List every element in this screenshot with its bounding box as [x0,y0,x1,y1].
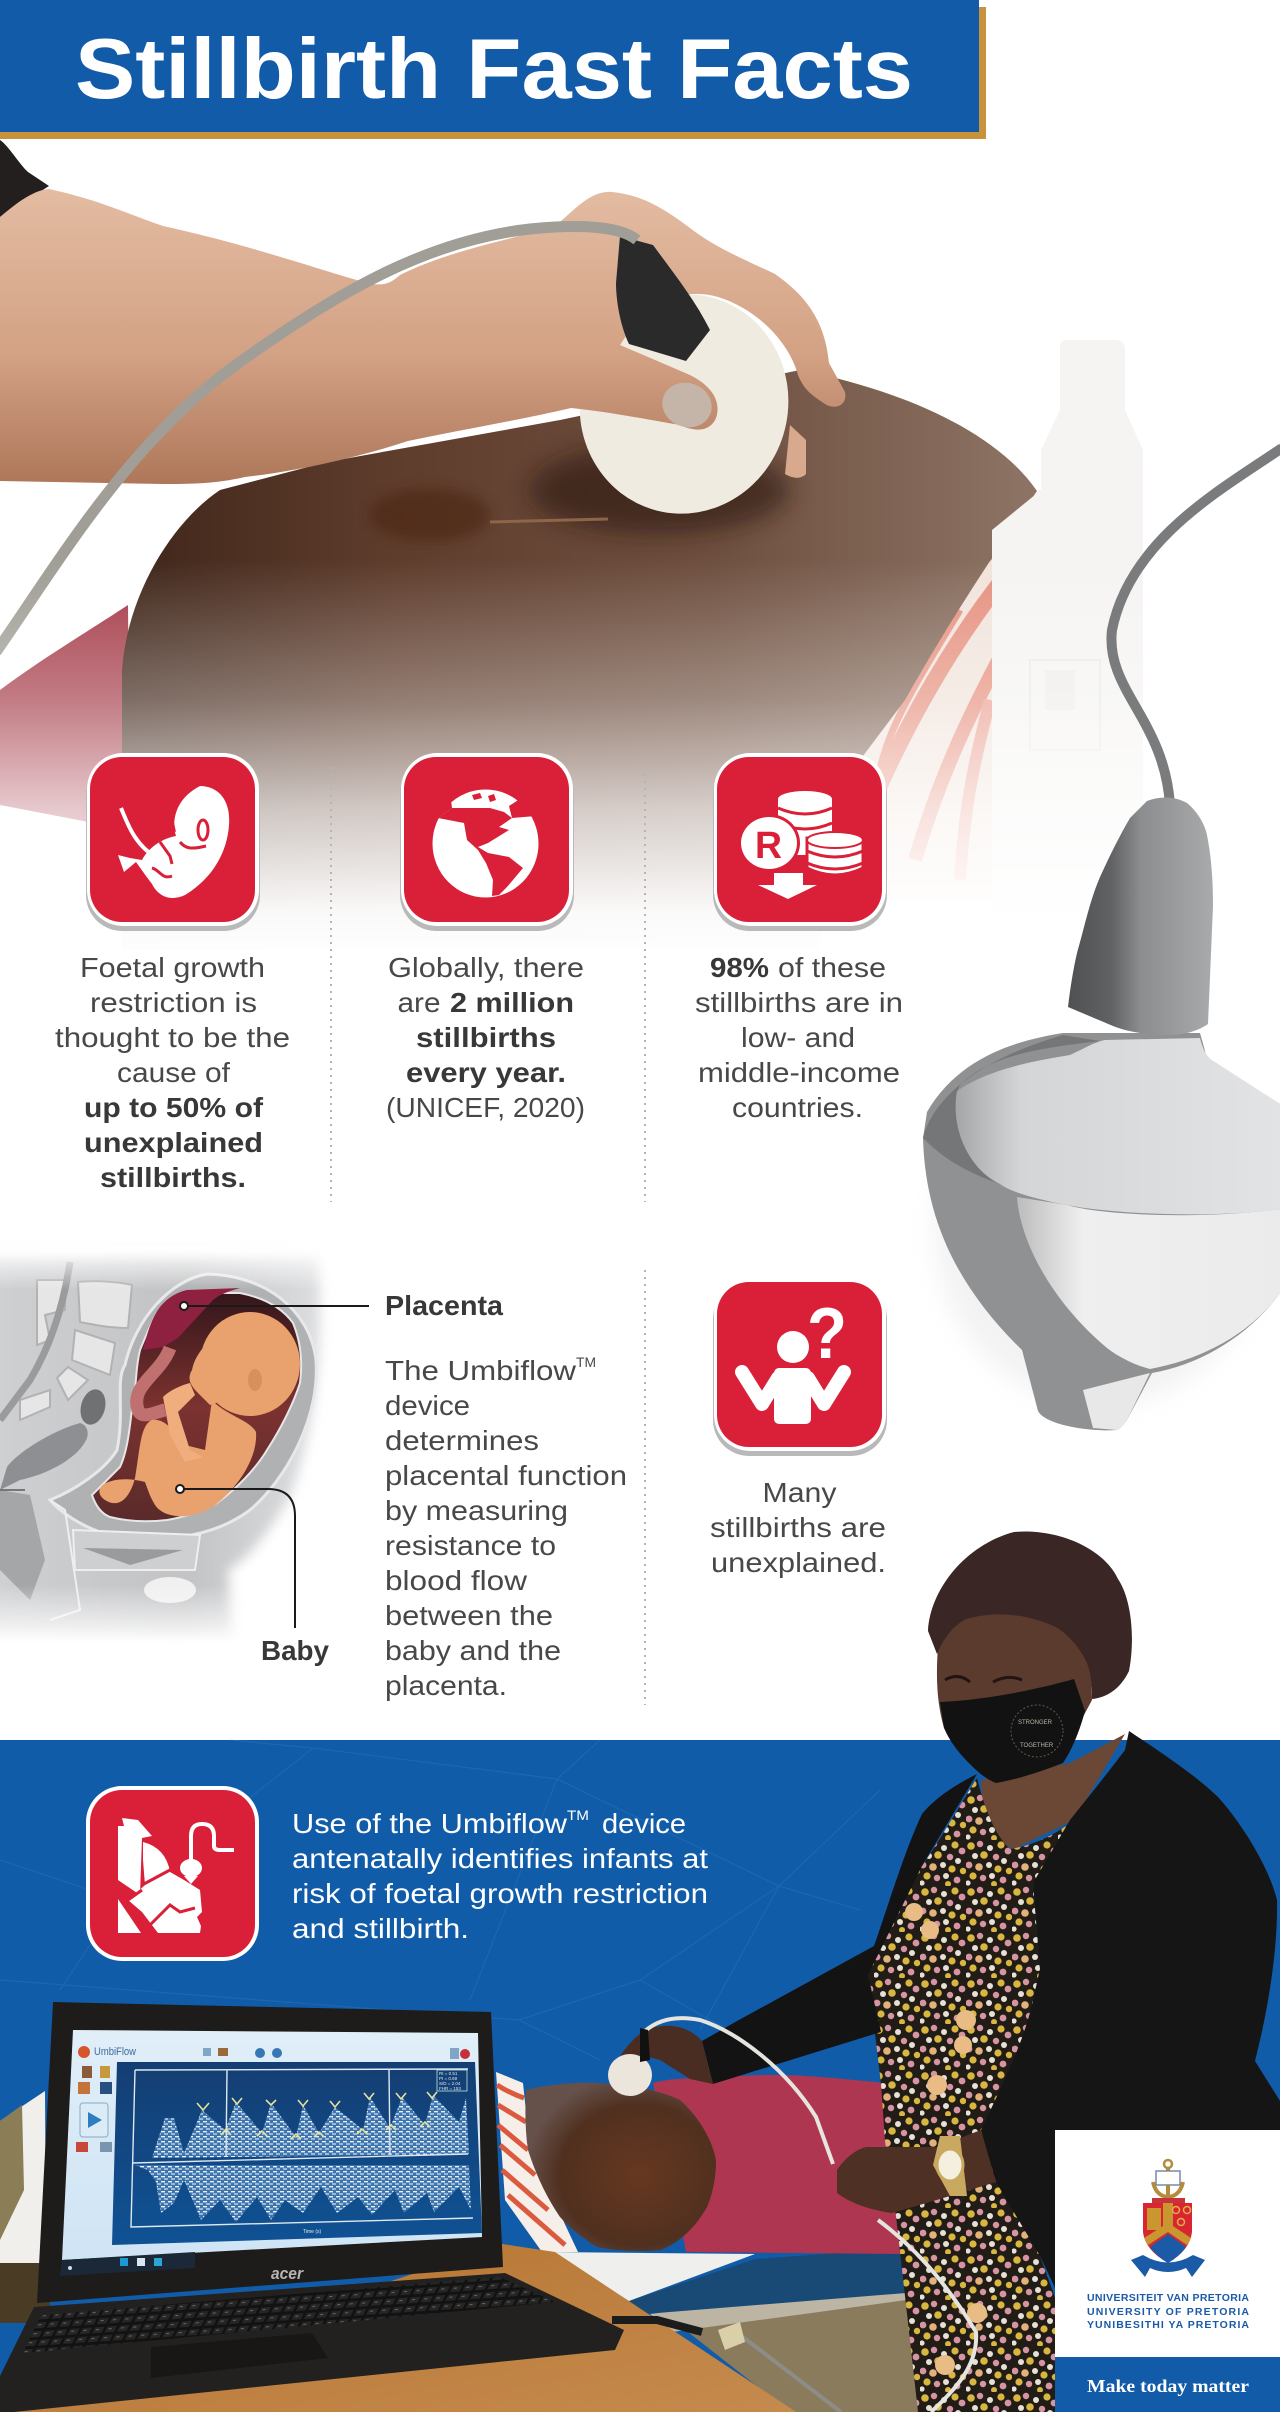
doppler plot area [112,2062,482,2245]
white fade [0,560,1280,960]
probe neck [1068,797,1213,1035]
nurse face [937,1610,1092,1760]
icon: foetus [86,753,260,931]
umbilical cord [137,1348,170,1415]
crest [1131,2160,1205,2277]
striped clothing at right [800,490,1100,900]
divider lines [331,767,645,1705]
hero photo: ultrasound on pregnant belly [0,140,1280,960]
probe bowl light area [1017,1197,1280,1369]
baby leader [176,1485,295,1628]
text: foetal growth restriction: unexplained [84,1127,263,1158]
text: umbiflow device explanation [385,1354,627,1701]
app controls [76,2048,470,2152]
text: low and middle income: low- and [741,1022,855,1053]
plot readout: FHR = 153 [439,2086,461,2091]
probe dome shadow rim [923,1035,1100,1184]
text: global stillbirths: (UNICEF, 2020) [386,1092,585,1123]
icon: person shrugging with question mark [713,1278,887,1456]
label: baby: Baby [261,1635,329,1666]
University of Pretoria logo box [1055,2130,1280,2412]
wrist watch [933,2136,967,2196]
probe dome [956,1038,1280,1214]
university names: UNIVERSITEIT VAN PRETORIA [1087,2292,1249,2304]
red top of patient [653,2075,900,2254]
slogan: Make today matter [1087,2376,1249,2396]
laptop brand: acer [271,2264,304,2283]
face mask [940,1679,1085,1783]
floral dress [868,1778,1074,2412]
shield [1143,2203,1192,2263]
text: many stillbirths unexplained: stillbirths are [710,1512,886,1543]
plot readout [303,2070,467,2235]
keyboard [23,2277,555,2353]
black sleeve [0,140,49,217]
belly [122,370,1037,950]
text: many stillbirths unexplained: unexplained. [711,1547,886,1578]
text: umbiflow identifies infants at risk: antenatally identifies infants at [292,1843,708,1874]
cardigan sleeve [702,1774,977,2084]
laptop [0,2002,624,2412]
white cloth left [0,2091,46,2263]
text: umbiflow device explanation: blood flow [385,1565,528,1596]
text: umbiflow device explanation: by measuring [385,1495,568,1526]
text: low and middle income: stillbirths are in [695,987,903,1018]
clinic scene photo [0,1532,1280,2412]
doppler waveform [134,2095,471,2222]
edge fades [0,1245,345,1290]
screen [62,2030,482,2260]
hand and forearm holding cable [837,2130,996,2213]
hair [928,1532,1132,1699]
text: low and middle income: 98% [710,952,769,983]
paper sheet [549,2252,755,2301]
text: low and middle income: countries. [732,1092,863,1123]
text: many stillbirths unexplained: Many [762,1477,836,1508]
plot readout: Time (s) [303,2229,321,2235]
text: umbiflow device explanation: device [385,1390,470,1421]
probe cable [0,227,637,652]
title banner [0,0,986,139]
nurse [608,1532,1280,2412]
charger cable and tag [612,2320,841,2412]
icon: coins and down arrow [713,753,887,931]
text: umbiflow device explanation: determines [385,1425,539,1456]
taskbar [60,2252,195,2276]
nurse neck and chest [981,1734,1125,1849]
icon: coins and down arrow: R [755,825,782,867]
patient belly [525,2083,716,2251]
little finger tip [785,425,806,478]
spine vertebrae [20,1280,132,1420]
text: foetal growth restriction: cause of [117,1057,230,1088]
text: foetal growth restriction: Foetal growth [80,952,265,983]
probe cable [1111,448,1280,806]
rectum hole [77,1387,109,1427]
anchor and book [1152,2160,1185,2203]
text: umbiflow identifies infants at risk: Use of the Umbiflow [292,1808,568,1839]
baby [99,1312,300,1516]
striped shirt [496,2072,578,2252]
text: foetal growth restriction: stillbirths. [100,1162,246,1193]
text: foetal growth restriction: thought to be the [55,1022,290,1053]
icon: globe [400,753,574,931]
title: Stillbirth Fast Facts [75,22,913,117]
placenta leader [180,1302,369,1310]
amniotic sac [92,1293,301,1521]
laptop base [0,2273,624,2412]
probe connector [616,236,710,361]
university names [1087,2292,1249,2331]
hand on probe [612,2026,713,2084]
probe bowl silhouette [923,1033,1280,1430]
text: global stillbirths [386,952,585,1123]
text: low and middle income: middle-income [698,1057,900,1088]
app logo text: UmbiFlow [94,2046,136,2058]
text: umbiflow identifies infants at risk: and stillbirth. [292,1913,469,1944]
text: umbiflow identifies infants at risk: TM [567,1807,589,1823]
text: global stillbirths: Globally, there [388,952,584,983]
icon: ultrasound on pregnant abdomen [86,1786,259,1961]
text: global stillbirths: every year. [406,1057,566,1088]
text: umbiflow device explanation: placental function [385,1460,627,1491]
small probe head [608,2054,652,2096]
colon [0,1423,88,1490]
text: umbiflow identifies infants at risk: risk of foetal growth restriction [292,1878,708,1909]
text: global stillbirths: are [398,987,440,1018]
eyes [945,1676,1022,1682]
cardigan body [981,1731,1280,2290]
text: umbiflow device explanation: TM [576,1354,596,1370]
icon: person shrugging with question mark: ? [807,1294,847,1374]
thumb nail [656,376,718,434]
text: umbiflow identifies infants at risk [292,1807,708,1944]
small probe cable [645,2018,976,2412]
label: placenta: Placenta [385,1290,503,1321]
plot axes [131,2069,473,2227]
text: umbiflow device explanation: baby and the [385,1635,561,1666]
screen bezel [37,2002,503,2303]
text: many stillbirths unexplained [710,1477,886,1578]
face mask: TOGETHER [1020,1743,1054,1749]
probe illustration [923,448,1280,1430]
ear [248,1369,262,1391]
text: foetal growth restriction [55,952,290,1193]
touchpad [151,2333,328,2378]
probe nub highlight [1083,1373,1150,1430]
face mask: STRONGER [1018,1720,1053,1726]
text: umbiflow device explanation: between the [385,1600,553,1631]
university names: UNIVERSITY OF PRETORIA [1087,2306,1249,2318]
uterus wall [50,1274,316,1539]
bladder and lower organs [50,1500,200,1620]
text: umbiflow identifies infants at risk: device [602,1808,686,1839]
plot readout: RI = 0.51 [439,2071,458,2076]
blue bed mattress [629,2248,906,2314]
white ultrasound probe head [556,272,812,536]
text: low and middle income: of these [778,952,886,983]
faded gel bottle [992,340,1143,960]
text: low and middle income [695,952,903,1123]
small probe connector [640,2028,650,2062]
blue section background [0,1740,1280,2412]
text: foetal growth restriction: up to 50% of [84,1092,264,1123]
arm and hand [0,189,845,484]
text: foetal growth restriction: restriction is [90,987,257,1018]
anatomy illustration [0,1245,369,1665]
wooden table [0,2244,796,2412]
placenta [143,1288,240,1350]
university names: YUNIBESITHI YA PRETORIA [1087,2319,1249,2331]
text: umbiflow device explanation: The Umbiflow [385,1355,577,1386]
bed base [660,2290,920,2412]
text: umbiflow device explanation: placenta. [385,1670,507,1701]
peak markers [197,2092,437,2139]
text: global stillbirths: 2 million [450,987,574,1018]
scroll [1131,2255,1205,2277]
text: umbiflow device explanation: resistance to [385,1530,556,1561]
plot readout: S/D = 2.04 [439,2081,461,2086]
red shirt at left [0,605,130,830]
text: global stillbirths: stillbirths [416,1022,556,1053]
plot readout: PI = 0.69 [439,2076,458,2081]
